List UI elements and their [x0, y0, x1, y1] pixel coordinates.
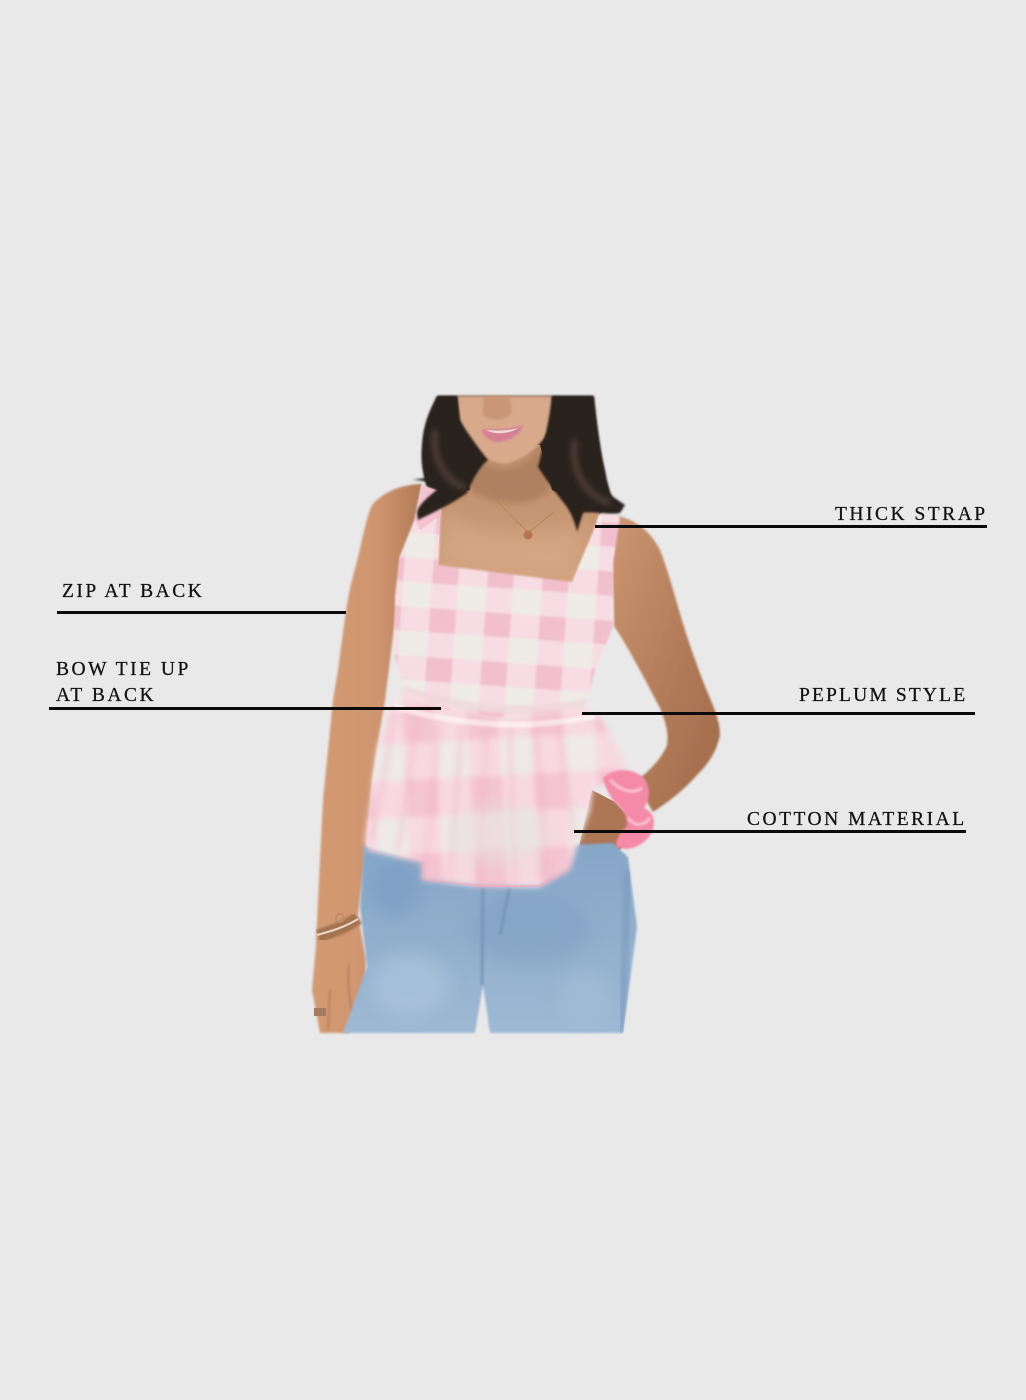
callout: bow tie up at back [49, 659, 441, 710]
necklace [484, 486, 554, 540]
scrunchie [603, 770, 654, 849]
hair back [422, 396, 612, 515]
right arm [612, 516, 720, 812]
callout: zip at back [57, 581, 346, 614]
hair front: left lock [412, 396, 488, 520]
callout: bow tie up at back: AT BACK [56, 685, 156, 706]
infographic canvas [49, 394, 987, 1034]
face [457, 396, 553, 464]
callout: peplum style [582, 685, 975, 715]
model photo: woman in pink gingham peplum top and jeans [312, 396, 720, 1033]
nose shadow [482, 396, 511, 420]
jeans [343, 843, 637, 1033]
ring [314, 1008, 326, 1016]
chest highlight [440, 510, 585, 575]
callout: thick strap [595, 504, 988, 528]
left arm [312, 484, 422, 1033]
bodice: gingham [395, 485, 620, 718]
callout: cotton material [574, 809, 967, 833]
neck shadow [470, 450, 550, 503]
bracelets [317, 914, 358, 936]
left hand fingers [328, 965, 356, 1030]
mouth [481, 425, 524, 442]
neck and chest [438, 445, 600, 584]
callout: cotton material: COTTON MATERIAL [747, 809, 967, 830]
hair front: right lock [538, 396, 625, 532]
callout: zip at back: ZIP AT BACK [62, 581, 204, 602]
callout: bow tie up at back: BOW TIE UP [56, 659, 191, 680]
hair highlights [435, 430, 610, 503]
callout: thick strap: THICK STRAP [835, 504, 988, 525]
hand in pocket [578, 790, 630, 850]
callout: peplum style: PEPLUM STYLE [799, 685, 967, 706]
peplum skirt: gingham with folds [365, 688, 628, 887]
